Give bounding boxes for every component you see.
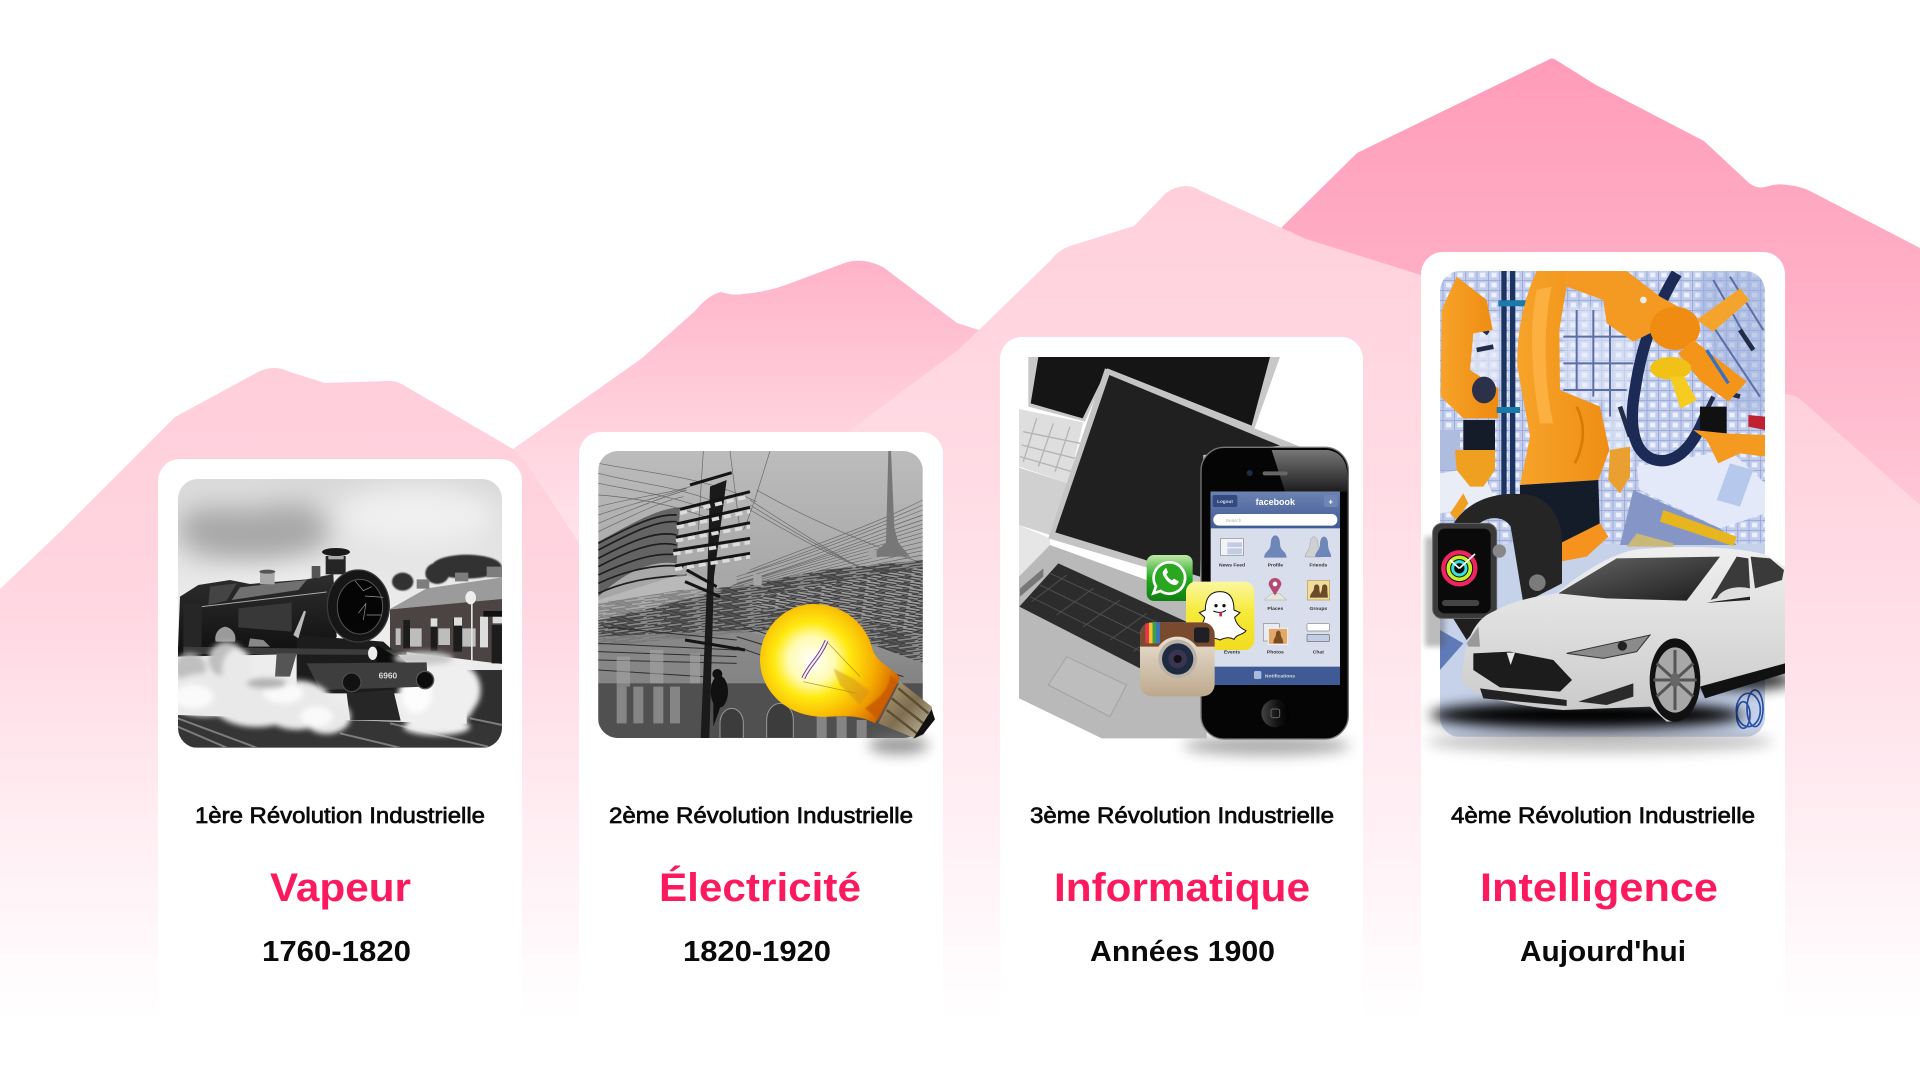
upper robot arm: [1566, 271, 1697, 342]
facebook menu icons: [1221, 535, 1331, 644]
label: revolution 2: 2ème Révolution Industrielle: [609, 803, 913, 828]
icons: apple watch and tesla: [1425, 494, 1793, 753]
front laptop base: [1019, 545, 1207, 738]
facebook menu labels: Photos: [1267, 649, 1284, 655]
photo: robot factory: [1440, 271, 1765, 737]
icon: instagram: [1140, 622, 1215, 696]
chassis: [1637, 450, 1765, 528]
label: revolution 4: 4ème Révolution Industrielle: [1451, 803, 1755, 828]
photo: telegraph wires: [598, 451, 923, 738]
facebook menu labels: Places: [1267, 606, 1283, 612]
locomotive body: [178, 574, 337, 657]
icon: snapchat: [1186, 582, 1254, 650]
smartphone: [1201, 447, 1348, 739]
facebook plus: +: [1328, 497, 1333, 506]
icon: whatsapp: [1147, 555, 1193, 601]
title: Vapeur: Vapeur: [270, 866, 411, 910]
title: Électricité: Électricité: [659, 865, 861, 910]
facebook menu labels: Profile: [1268, 563, 1283, 569]
watch band: [1453, 494, 1562, 603]
dates 1: 1760-1820: [262, 936, 411, 968]
blue cable scribble: [1736, 690, 1763, 728]
title: Intelligence: Intelligence: [1480, 866, 1718, 910]
facebook notifications: Notifications: [1265, 674, 1295, 680]
label: revolution 1: 1ère Révolution Industrielle: [195, 803, 485, 828]
facebook menu labels: [1219, 563, 1328, 655]
robot bases: [1520, 480, 1600, 543]
mountain 4: [1282, 58, 1920, 620]
steam left: [167, 642, 351, 734]
dark hose: [1632, 273, 1705, 461]
card 4 background: [1421, 252, 1785, 1079]
dates 3: Années 1900: [1090, 936, 1275, 968]
panel: 3ème révolution: [1000, 337, 1363, 1079]
label: revolution 3: 3ème Révolution Industrielle: [1030, 803, 1334, 828]
dates 4: Aujourd'hui: [1520, 936, 1686, 968]
steam right: [393, 652, 481, 735]
facebook search: Search: [1226, 518, 1242, 524]
facebook menu labels: Groups: [1309, 606, 1327, 612]
back laptop: [1028, 357, 1280, 432]
panel: 4ème révolution: [1421, 252, 1785, 967]
facebook menu labels: News Feed: [1219, 563, 1245, 569]
mountain front right: [1700, 394, 1920, 1020]
facebook menu labels: Chat: [1313, 649, 1324, 655]
title: Informatique: Informatique: [1054, 866, 1310, 910]
card 3 background: [1000, 337, 1363, 1079]
facebook menu labels: Events: [1224, 649, 1240, 655]
panel: 1ère révolution: [158, 459, 522, 962]
mountain 3: [700, 186, 1600, 1020]
facebook header text: facebook: [1256, 497, 1296, 507]
facebook logout: Logout: [1217, 499, 1233, 504]
icon: light bulb: [760, 604, 935, 754]
panel: 2ème révolution: [579, 432, 943, 962]
mountain 1: [0, 368, 579, 1020]
main robot arm: [1517, 271, 1610, 485]
card 2 background: [579, 432, 943, 1079]
facebook menu labels: Friends: [1309, 563, 1328, 569]
yellow flange: [1650, 357, 1691, 380]
front laptop lid: [1048, 368, 1300, 583]
left robot arm: [1441, 277, 1498, 418]
mountain 2: [513, 261, 1000, 560]
electric pole: [876, 451, 910, 557]
card 1 background: [158, 459, 522, 1079]
photo: laptops and smartphone: [1019, 357, 1350, 756]
car body: [1462, 547, 1785, 722]
cables: [1504, 271, 1513, 497]
dates 2: 1820-1920: [683, 936, 831, 968]
locomotive number: 6960: [379, 671, 398, 681]
photo: steam locomotive: [167, 479, 502, 748]
